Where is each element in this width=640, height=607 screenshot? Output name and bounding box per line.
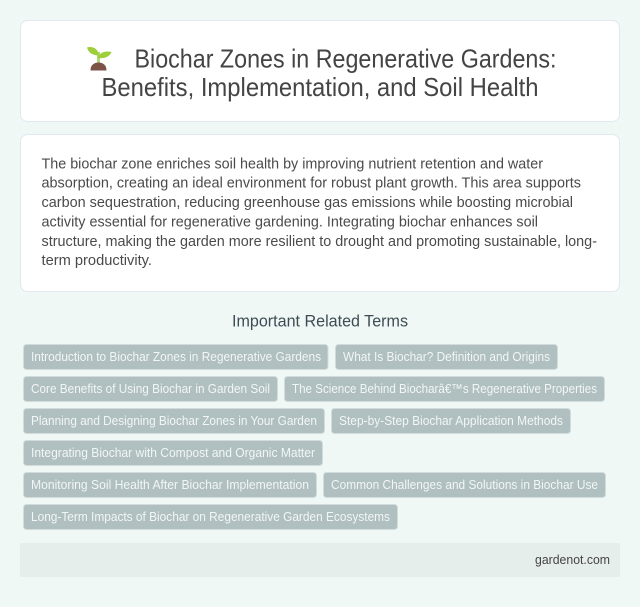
- tag: integrating: [24, 440, 322, 466]
- tag: planning: Planning and Designing Biochar Zones in Your Garden: [31, 413, 317, 428]
- panel: description card: [20, 134, 620, 292]
- panel: title card: [20, 20, 620, 122]
- text block: description: carbon sequestration, reducing greenhouse gas emissions while boosting microbial: [42, 194, 573, 211]
- tag: common challenges: [324, 472, 606, 498]
- tag: core benefits: [24, 376, 278, 402]
- tag: planning: [24, 408, 324, 434]
- tag: introduction: Introduction to Biochar Zones in Regenerative Gardens: [31, 349, 321, 364]
- tag: the science: [284, 376, 604, 402]
- footer: site name: gardenot.com: [535, 552, 610, 567]
- tag: long-term impacts: Long-Term Impacts of Biochar on Regenerative Garden Ecosystems: [31, 509, 390, 524]
- tag: core benefits: Core Benefits of Using Biochar in Garden Soil: [31, 381, 270, 396]
- text block: description: absorption, creating an ideal environment for robust plant growth. This area supports: [42, 174, 581, 192]
- text block: description: The biochar zone enriches soil health by improving nutrient retention and water: [42, 155, 543, 172]
- tag: step by step: [332, 408, 570, 434]
- tag: introduction: [24, 344, 328, 370]
- tag: monitoring: Monitoring Soil Health After Biochar Implementation: [31, 477, 309, 492]
- tag: what is biochar: [336, 344, 558, 370]
- tag: common challenges: Common Challenges and Solutions in Biochar Use: [331, 477, 598, 492]
- tag: step by step: Step-by-Step Biochar Application Methods: [339, 413, 563, 428]
- panel: related term tags: [24, 344, 606, 530]
- title: Biochar Zones in Regenerative Gardens:: [134, 44, 556, 74]
- text block: description: term productivity.: [42, 252, 152, 269]
- tag: the science: The Science Behind Biocharâ€™s Regenerative Properties: [292, 381, 597, 396]
- tag: monitoring: [24, 472, 316, 498]
- text block: description: structure, making the garden more resilient to drought and promoting sustainable, long-: [42, 233, 597, 250]
- tag: what is biochar: What Is Biochar? Definition and Origins: [343, 349, 550, 364]
- icon: seedling: [87, 47, 112, 70]
- footer: [20, 543, 620, 577]
- tag: long-term impacts: [24, 504, 398, 530]
- text block: description: activity essential for regenerative gardening. Integrating biochar enhances soil: [42, 214, 538, 230]
- heading: important related terms: Important Related Terms: [232, 312, 408, 330]
- tag: integrating: Integrating Biochar with Compost and Organic Matter: [31, 445, 316, 460]
- title: Benefits, Implementation, and Soil Health: [102, 72, 538, 102]
